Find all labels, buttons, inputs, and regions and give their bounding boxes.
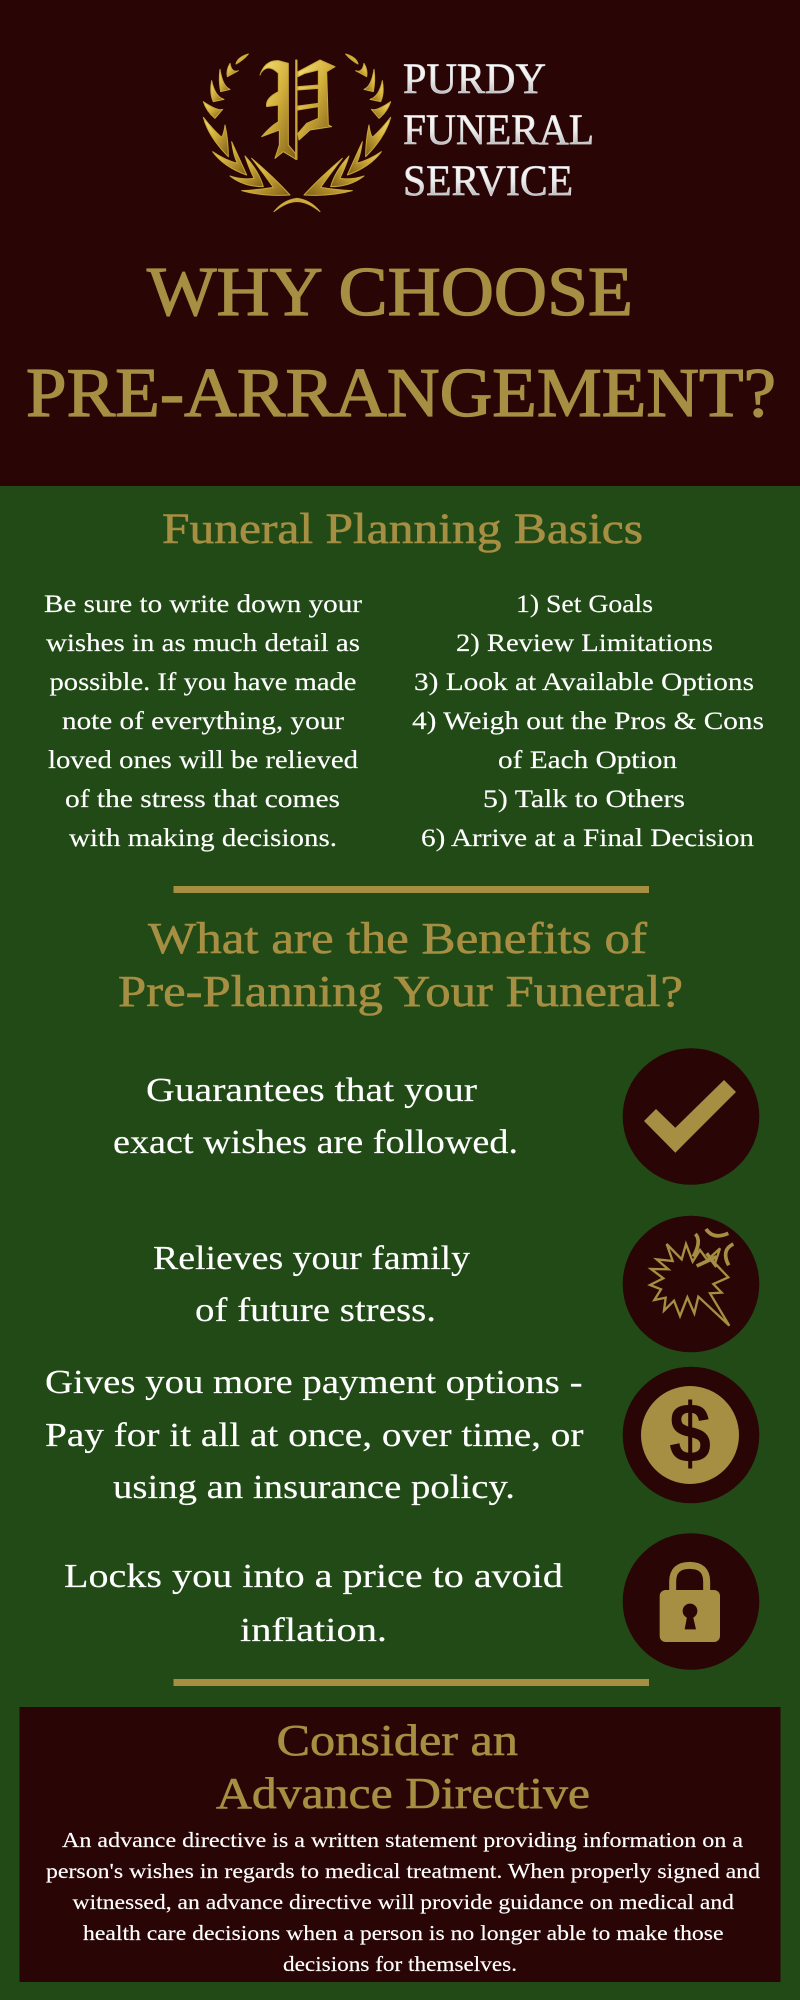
title: WHY CHOOSE bbox=[147, 254, 633, 331]
icon: dollar coin: $ bbox=[669, 1386, 711, 1480]
text block: write down your wishes: of the stress that comes bbox=[65, 786, 340, 813]
heading: benefits of pre-planning: Pre-Planning Your Funeral? bbox=[118, 967, 683, 1016]
benefit text: relieves stress: of future stress. bbox=[195, 1292, 436, 1329]
logo wordmark: FUNERAL bbox=[403, 107, 594, 154]
text block: write down your wishes: Be sure to write down your bbox=[44, 591, 363, 618]
text block: advance directive explanation bbox=[46, 1828, 761, 1976]
text block: write down your wishes: loved ones will be relieved bbox=[48, 747, 359, 774]
text block: write down your wishes: note of everything, your bbox=[62, 708, 345, 735]
title: PRE-ARRANGEMENT? bbox=[26, 355, 776, 432]
heading: Consider an Advance Directive: Advance Directive bbox=[216, 1769, 590, 1818]
icon: laurel wreath with letter P bbox=[203, 54, 391, 212]
benefit text: wishes followed: Guarantees that your bbox=[146, 1072, 478, 1109]
logo wordmark bbox=[403, 56, 594, 205]
text block: decision steps list: 5) Talk to Others bbox=[483, 786, 685, 813]
benefit text: wishes followed bbox=[113, 1072, 518, 1161]
text block: write down your wishes: wishes in as much detail as bbox=[46, 630, 360, 657]
benefit text: locks price: Locks you into a price to avoid bbox=[64, 1558, 563, 1595]
text block: write down your wishes: with making decisions. bbox=[69, 825, 337, 852]
icon: padlock bbox=[623, 1533, 759, 1670]
panel: advance directive bbox=[20, 1707, 780, 1982]
text block: decision steps list: 4) Weigh out the Pros & Cons bbox=[412, 708, 764, 735]
text block: decision steps list bbox=[412, 591, 764, 852]
benefit text: relieves stress: Relieves your family bbox=[153, 1240, 470, 1277]
benefit text: payment options: Gives you more payment options - bbox=[45, 1364, 582, 1401]
panel: maroon header bbox=[0, 0, 800, 486]
icon: stress burst bbox=[623, 1216, 759, 1352]
benefit text: payment options bbox=[45, 1364, 584, 1506]
benefit text: payment options: using an insurance policy. bbox=[113, 1469, 515, 1506]
text block: advance directive explanation: person's wishes in regards to medical treatment. When properly signed and bbox=[46, 1859, 761, 1883]
heading: Consider an Advance Directive: Consider an bbox=[276, 1716, 518, 1765]
text block: advance directive explanation: health care decisions when a person is no longer able to make those bbox=[83, 1921, 724, 1945]
text block: advance directive explanation: witnessed, an advance directive will provide guidance on medical and bbox=[72, 1890, 735, 1914]
heading: benefits of pre-planning bbox=[118, 914, 683, 1016]
icon: check mark bbox=[623, 1048, 759, 1185]
text block: write down your wishes bbox=[44, 591, 363, 852]
logo: Purdy Funeral Service bbox=[203, 54, 594, 212]
heading: Consider an Advance Directive bbox=[216, 1716, 590, 1818]
logo wordmark: PURDY bbox=[403, 56, 546, 103]
benefit text: locks price: inflation. bbox=[240, 1612, 387, 1649]
benefit text: relieves stress bbox=[153, 1240, 470, 1329]
benefit text: payment options: Pay for it all at once, over time, or bbox=[45, 1417, 584, 1454]
text block: decision steps list: 2) Review Limitations bbox=[456, 630, 713, 657]
logo wordmark: SERVICE bbox=[403, 158, 573, 205]
text block: decision steps list: 1) Set Goals bbox=[516, 591, 653, 618]
heading: Funeral Planning Basics: Funeral Planning Basics bbox=[162, 506, 643, 553]
text block: advance directive explanation: decisions for themselves. bbox=[283, 1952, 517, 1976]
text block: write down your wishes: possible. If you have made bbox=[50, 669, 357, 696]
title bbox=[26, 254, 776, 432]
icon: dollar coin bbox=[623, 1367, 759, 1503]
benefit text: wishes followed: exact wishes are followed. bbox=[113, 1124, 518, 1161]
text block: decision steps list: 3) Look at Available Options bbox=[414, 669, 754, 696]
text block: advance directive explanation: An advance directive is a written statement providing information on a bbox=[62, 1828, 744, 1852]
heading: benefits of pre-planning: What are the Benefits of bbox=[148, 914, 647, 963]
text block: decision steps list: 6) Arrive at a Final Decision bbox=[421, 825, 755, 852]
benefit text: locks price bbox=[64, 1558, 563, 1649]
text block: decision steps list: of Each Option bbox=[498, 747, 678, 774]
